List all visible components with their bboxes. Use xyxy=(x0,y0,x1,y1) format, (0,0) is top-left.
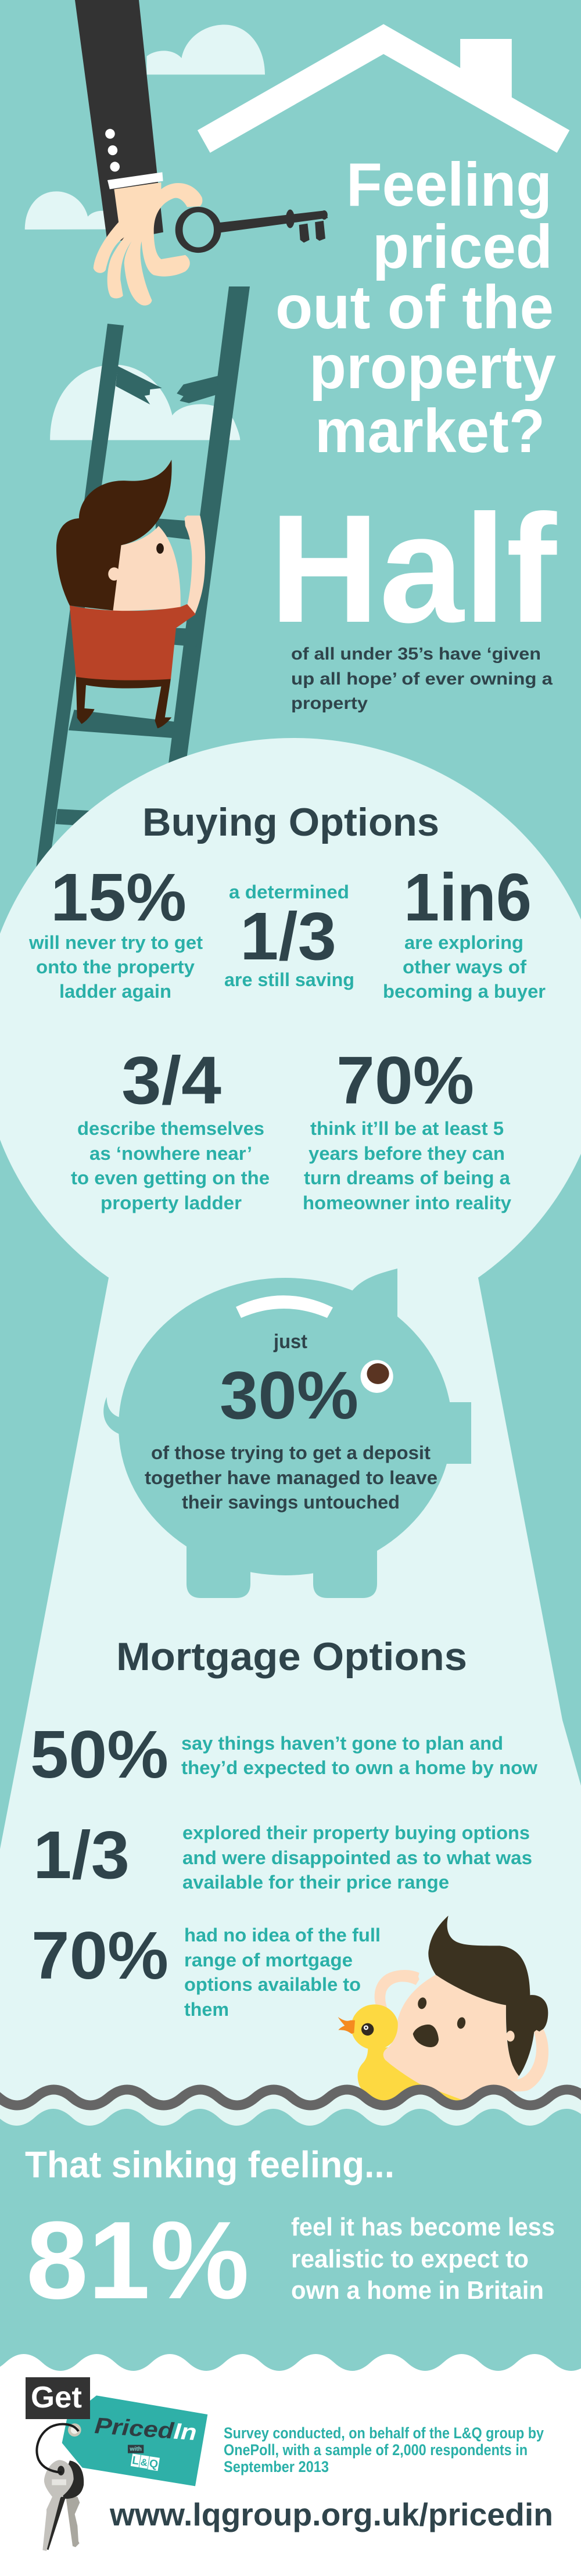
icon: drowning man with rubber duck xyxy=(338,1916,548,2104)
stat: 1in6: other ways of xyxy=(403,956,526,977)
with label xyxy=(128,2445,144,2453)
stat: 30% deposit: 30% xyxy=(220,1357,358,1433)
stat description: property xyxy=(291,694,368,713)
icon: water waves xyxy=(0,2090,581,2208)
stat: 81%: feel it has become less xyxy=(291,2213,555,2241)
icon: man climbing ladder xyxy=(56,460,205,728)
L&Q logo tiles: L xyxy=(131,2455,140,2468)
stat: 81%: 81% xyxy=(26,2199,249,2322)
stat: 1in6: 1in6 xyxy=(404,859,532,935)
broken rung xyxy=(116,366,218,404)
stat: 30% deposit: their savings untouched xyxy=(182,1492,400,1513)
stat: 30% deposit xyxy=(145,1331,437,1513)
stat: 1/3 saving: 1/3 xyxy=(240,898,336,974)
stat: 3/4: describe themselves xyxy=(77,1118,264,1139)
icon: arm and hand holding key xyxy=(75,0,328,306)
icon: piggy bank xyxy=(103,1269,471,1598)
stat: 1/3 saving xyxy=(224,882,354,990)
title: market? xyxy=(315,397,545,465)
stat: Half: Half xyxy=(270,483,558,655)
key ring xyxy=(37,2424,78,2473)
stat: 15%: will never try to get xyxy=(28,932,203,953)
stat: 70% years: 70% xyxy=(336,1042,474,1118)
icon: ladder xyxy=(36,286,250,869)
stat: 1/3 disappointed xyxy=(33,1817,532,1893)
title: priced xyxy=(372,213,553,281)
stat: 15% xyxy=(28,859,203,1002)
heading: That sinking feeling: That sinking feeling... xyxy=(25,2144,394,2186)
stat: 70% years: homeowner into reality xyxy=(303,1192,511,1213)
icon: house roof xyxy=(198,24,569,153)
stat: 1in6 xyxy=(383,859,546,1002)
stat: 1in6: are exploring xyxy=(404,932,523,953)
stat: 70% years: think it’ll be at least 5 xyxy=(310,1118,504,1139)
L&Q logo tiles xyxy=(131,2453,160,2471)
stat: 3/4 xyxy=(71,1042,270,1213)
L&Q logo tiles: Q xyxy=(148,2457,159,2471)
icon: cloud left xyxy=(25,191,122,230)
duck xyxy=(338,2004,469,2104)
stat: 70% mortgage: had no idea of the full xyxy=(184,1925,381,1946)
stat: 70% years: turn dreams of being a xyxy=(304,1167,510,1188)
keys xyxy=(42,2460,84,2551)
stat: 3/4: to even getting on the xyxy=(71,1167,270,1188)
panel: white footer xyxy=(0,2354,581,2576)
text: website url: www.lqgroup.org.uk/pricedin xyxy=(109,2496,553,2532)
title: property xyxy=(309,333,556,402)
stat: 70% years xyxy=(303,1042,511,1213)
stat: 1/3 disappointed: available for their price range xyxy=(182,1872,449,1893)
text: survey source xyxy=(224,2424,544,2475)
label: Get box xyxy=(26,2377,90,2419)
stat: 81%: own a home in Britain xyxy=(291,2276,544,2305)
text: survey source: September 2013 xyxy=(224,2458,329,2475)
stat: 30% deposit: together have managed to leave xyxy=(145,1467,437,1488)
title: out of the xyxy=(275,273,554,342)
icon: PricedIn key tag xyxy=(37,2395,207,2551)
stat: 15%: ladder again xyxy=(59,981,171,1002)
title: Feeling xyxy=(346,151,552,219)
label: Get box: Get xyxy=(31,2381,82,2414)
pig eye xyxy=(361,1360,393,1393)
stat: 81% xyxy=(26,2199,555,2322)
stat: 3/4: as ‘nowhere near’ xyxy=(89,1143,252,1164)
stat: 1/3 disappointed: explored their property buying options xyxy=(182,1822,530,1843)
stat: 1/3 saving: a determined xyxy=(229,882,349,902)
stat: 1/3 disappointed: and were disappointed as to what was xyxy=(182,1847,532,1868)
with label: with xyxy=(129,2446,142,2452)
heading: Mortgage Options: Mortgage Options xyxy=(116,1635,467,1679)
stat: 15%: onto the property xyxy=(36,956,195,977)
stat description: of all under 35’s have ‘given xyxy=(291,644,541,664)
tail xyxy=(103,1397,120,1435)
sleeve xyxy=(75,0,163,243)
stat description: up all hope’ of ever owning a xyxy=(291,669,553,689)
stat: 1/3 disappointed: 1/3 xyxy=(33,1817,130,1893)
panel: keyhole background xyxy=(0,738,581,2150)
stat: 81%: realistic to expect to xyxy=(291,2245,529,2273)
stat: 3/4: 3/4 xyxy=(121,1042,221,1118)
stat: 70% mortgage: 70% xyxy=(31,1918,168,1993)
tag wordmark: Priced In xyxy=(94,2413,198,2445)
heading: Buying Options: Buying Options xyxy=(142,800,439,844)
stat: 15%: 15% xyxy=(51,859,187,935)
L&Q logo tiles: & xyxy=(140,2456,149,2468)
stat: 1/3 saving: are still saving xyxy=(224,969,354,990)
coin slot xyxy=(236,1295,333,1318)
stat description xyxy=(291,644,553,713)
stat: 70% mortgage xyxy=(31,1918,381,2020)
stat: 30% deposit: of those trying to get a deposit xyxy=(151,1442,431,1463)
stat: 3/4: property ladder xyxy=(101,1192,242,1213)
stat: 50%: 50% xyxy=(30,1717,168,1792)
stat: 70% years: years before they can xyxy=(309,1143,505,1164)
title xyxy=(275,151,556,465)
stat: 50% xyxy=(30,1717,537,1792)
cuff xyxy=(94,129,328,306)
stat: 50%: say things haven’t gone to plan and xyxy=(181,1733,503,1754)
stat: 30% deposit: just xyxy=(273,1331,307,1353)
text: survey source: OnePoll, with a sample of 2,000 respondents in xyxy=(224,2441,528,2459)
stat: 50%: they’d expected to own a home by now xyxy=(181,1757,537,1778)
rungs xyxy=(56,518,202,830)
key xyxy=(218,210,328,243)
icon: cloud behind ladder xyxy=(50,365,240,440)
stat: 1in6: becoming a buyer xyxy=(383,981,546,1002)
stat: 70% mortgage: range of mortgage xyxy=(184,1950,353,1970)
icon: cloud top xyxy=(147,24,265,74)
stat: 70% mortgage: options available to xyxy=(184,1974,361,1995)
stat: 70% mortgage: them xyxy=(184,1999,229,2020)
